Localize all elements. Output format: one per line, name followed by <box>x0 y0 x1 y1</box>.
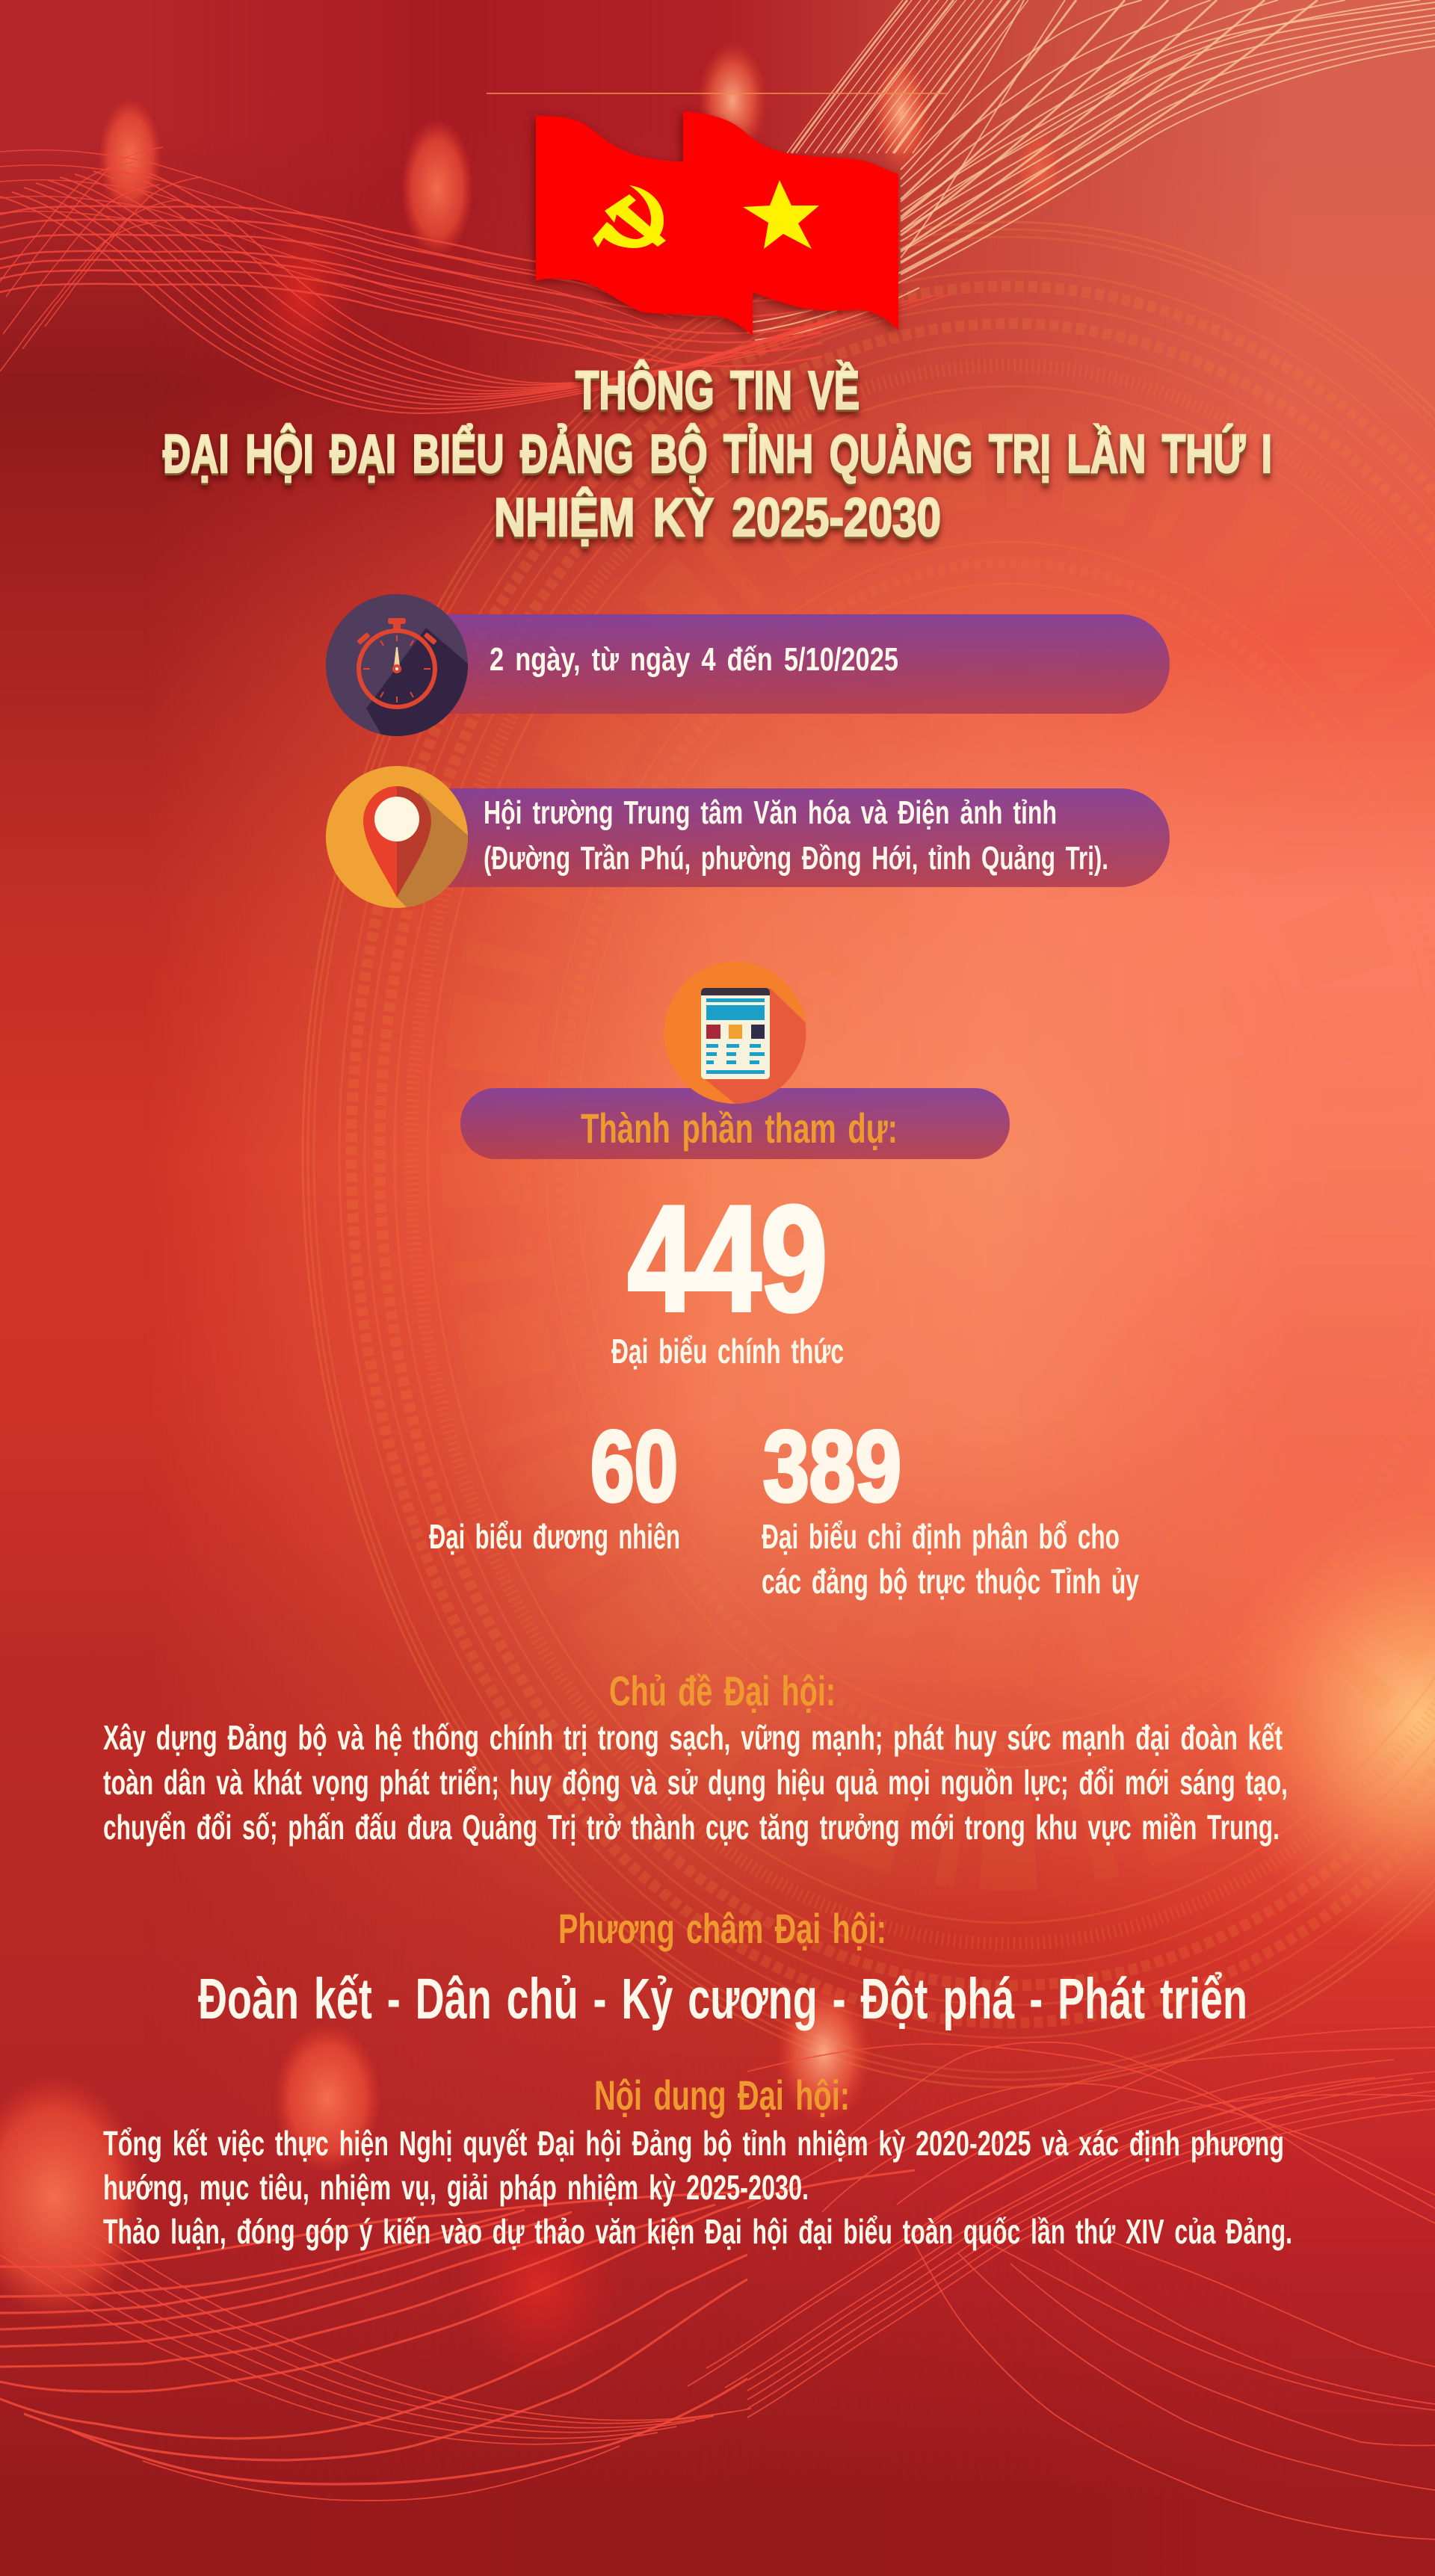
stat: 60 ex officio delegates <box>429 1411 680 1556</box>
panel: attendance heading <box>460 962 1010 1159</box>
header divider line <box>487 93 948 94</box>
section: congress motto: Phương châm Đại hội: <box>558 1905 886 1952</box>
stat: 389 allocated delegates: Đại biểu chỉ định phân bổ cho <box>762 1517 1120 1556</box>
stat: 389 allocated delegates: các đảng bộ trực thuộc Tỉnh ủy <box>762 1562 1139 1601</box>
stat: 449 official delegates: Đại biểu chính thức <box>611 1332 844 1371</box>
title: THÔNG TIN VỀ <box>575 360 860 421</box>
section: congress content: Nội dung Đại hội: <box>594 2072 850 2119</box>
stat: 389 allocated delegates: 389 <box>763 1411 901 1522</box>
panel: time <box>326 594 1170 747</box>
text: duration: 2 ngày, từ ngày 4 đến 5/10/2025 <box>490 641 898 678</box>
wave lines: left red bundle <box>0 147 953 413</box>
bronze drum rings pattern <box>303 222 1435 2087</box>
wave lines: bottom red bundle <box>0 2027 1435 2539</box>
text: venue address: (Đường Trần Phú, phường Đồng Hới, tỉnh Quảng Trị). <box>484 840 1108 877</box>
icon: document circle <box>664 962 806 1104</box>
text: attendance heading: Thành phần tham dự: <box>581 1105 898 1152</box>
icon: map pin <box>326 766 468 908</box>
icon: hammer and sickle <box>593 185 666 248</box>
section: congress theme: Chủ đề Đại hội: <box>609 1667 836 1714</box>
title <box>163 360 1272 548</box>
stat: 60 ex officio delegates: Đại biểu đương nhiên <box>429 1517 680 1556</box>
icon: stopwatch <box>326 594 468 736</box>
section: congress motto <box>198 1905 1247 2031</box>
wave lines: top right cream lattice <box>747 0 1435 340</box>
title: NHIỆM KỲ 2025-2030 <box>494 487 941 548</box>
section: congress theme <box>103 1667 1288 1847</box>
icon: party and national flags <box>536 111 898 336</box>
section: congress content: hướng, mục tiêu, nhiệm vụ, giải pháp nhiệm kỳ 2025-2030. <box>103 2168 809 2207</box>
stat: 449 official delegates: 449 <box>628 1176 827 1342</box>
icon: yellow star <box>743 180 819 249</box>
section: congress content <box>103 2072 1292 2251</box>
stat: 389 allocated delegates <box>762 1411 1139 1601</box>
bokeh light spots <box>0 42 1061 2382</box>
panel: venue <box>326 766 1170 919</box>
text: venue address: Hội trường Trung tâm Văn hóa và Điện ảnh tỉnh <box>484 794 1057 831</box>
text: venue address <box>484 794 1108 877</box>
stat: 60 ex officio delegates: 60 <box>590 1411 678 1522</box>
